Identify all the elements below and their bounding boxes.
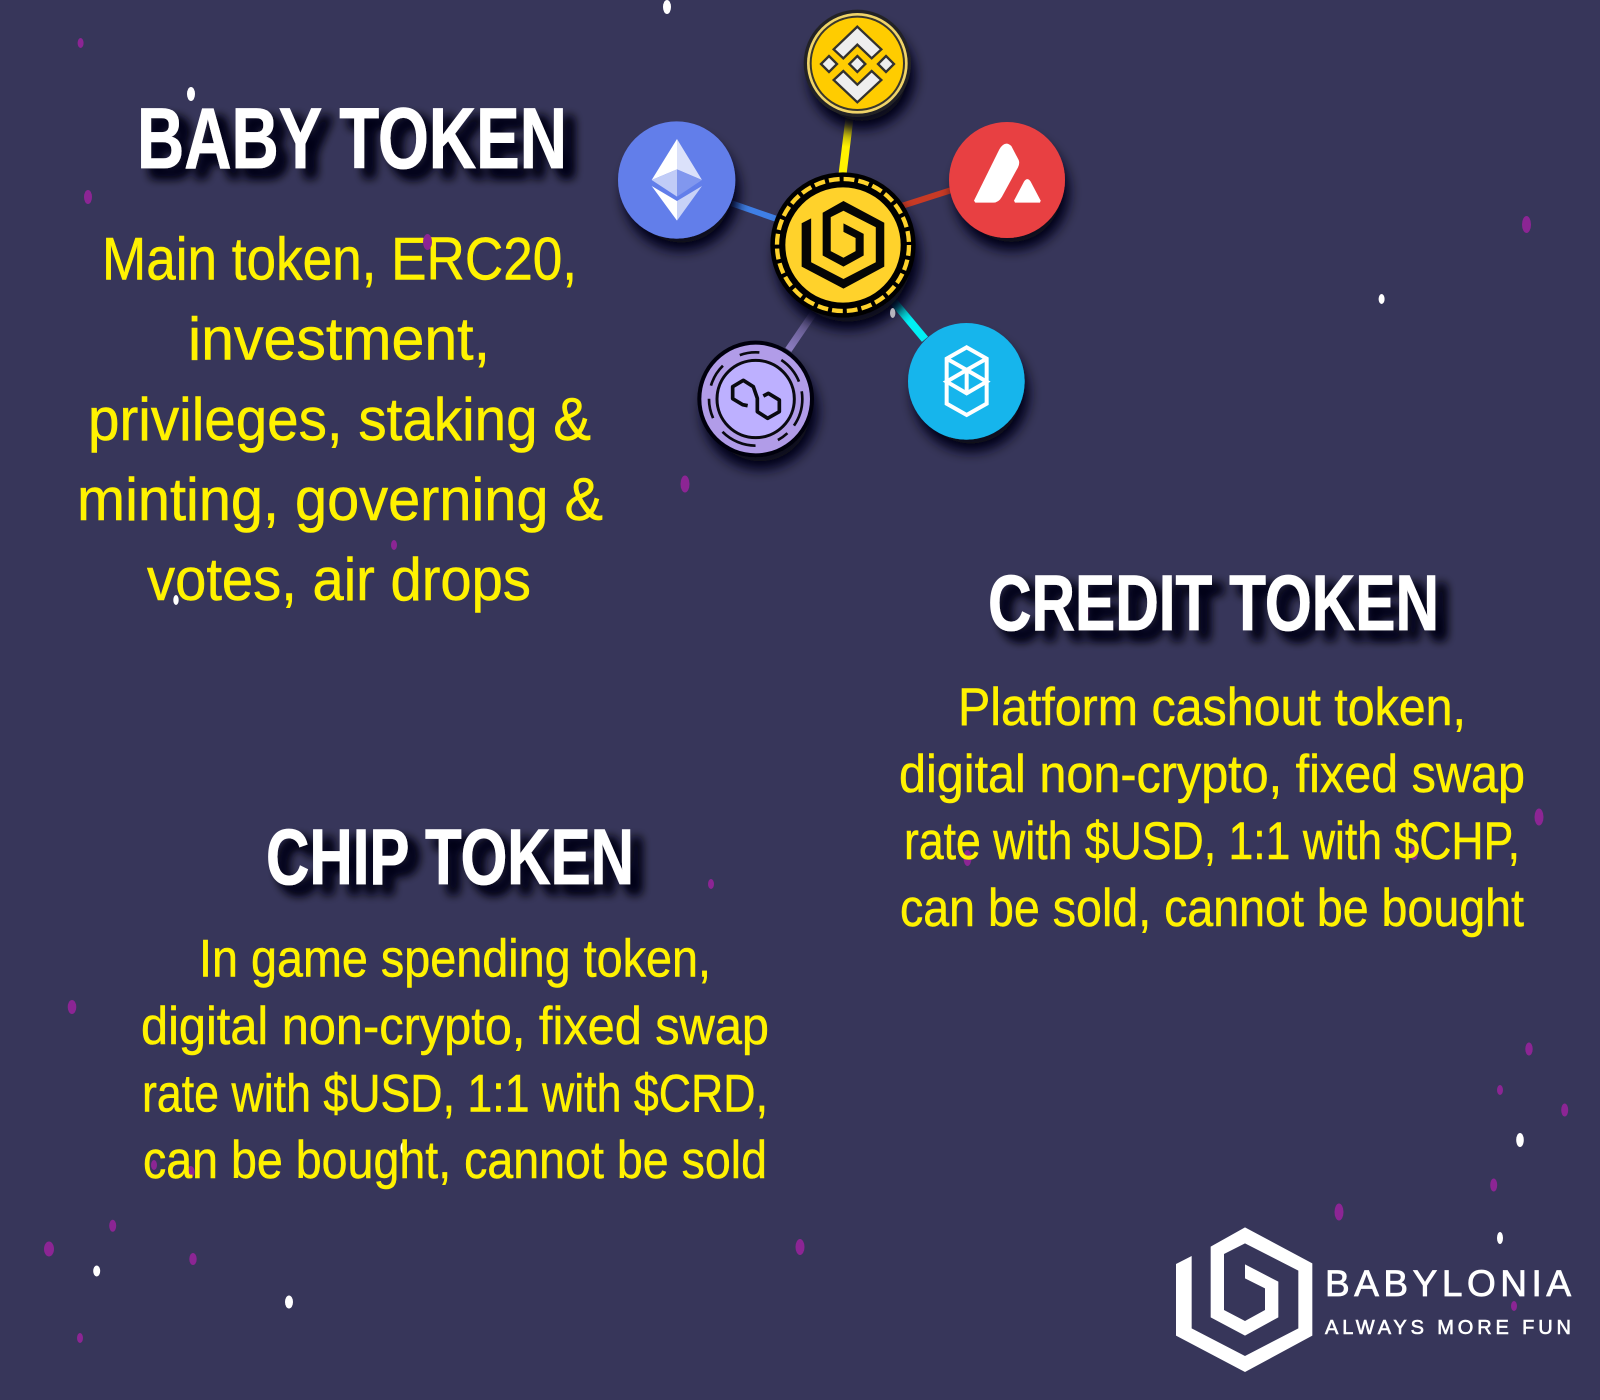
panel: baby token: [77, 91, 603, 613]
text block: baby token description: investment,: [188, 306, 490, 372]
text block: credit token description: Platform cashout token,: [958, 678, 1466, 737]
text block: chip token description: digital non-crypto, fixed swap: [141, 997, 769, 1056]
connector lines: [732, 117, 952, 350]
panel: credit token: [899, 558, 1525, 938]
heading: chip token: CHIP TOKEN: [266, 812, 634, 901]
text block: credit token description: [899, 678, 1525, 938]
brand logo: babylonia: [1176, 1227, 1571, 1372]
logo wordmark: BABYLONIA: [1325, 1263, 1571, 1304]
text block: baby token description: privileges, staking &: [88, 386, 591, 453]
icon: binance coin: [804, 10, 911, 117]
icon: central babylonia coin: [770, 172, 916, 318]
text block: credit token description: can be sold, cannot be bought: [900, 879, 1524, 938]
text block: chip token description: In game spending token,: [199, 930, 711, 988]
text block: baby token description: Main token, ERC20,: [102, 226, 577, 292]
text block: chip token description: can be bought, cannot be sold: [143, 1131, 767, 1190]
text block: credit token description: digital non-crypto, fixed swap: [899, 745, 1525, 804]
gray dot over connector: [890, 308, 895, 318]
icon: fantom coin: [908, 323, 1025, 440]
logo tagline: ALWAYS MORE FUN: [1325, 1317, 1571, 1339]
icon: ethereum coin: [618, 121, 735, 239]
text block: chip token description: rate with $USD, 1:1 with $CRD,: [142, 1064, 768, 1124]
icon: polygon coin: [697, 341, 814, 457]
text block: baby token description: [77, 226, 603, 613]
text block: chip token description: [141, 930, 769, 1190]
panel: chip token: [141, 812, 769, 1190]
heading: credit token: CREDIT TOKEN: [988, 558, 1439, 647]
text block: baby token description: minting, governing &: [77, 466, 603, 533]
token network diagram: [618, 10, 1065, 457]
text block: baby token description: votes, air drops: [147, 546, 531, 613]
purple dot over ERC20: [423, 234, 432, 250]
icon: avalanche coin: [949, 122, 1065, 238]
logo mark: [1176, 1227, 1312, 1372]
heading: baby token: BABY TOKEN: [137, 91, 567, 187]
